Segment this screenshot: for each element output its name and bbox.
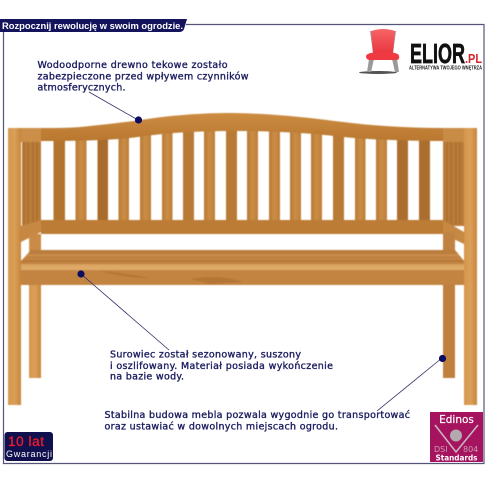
callout: seasoned material [77,270,333,382]
backrest slats [54,130,430,221]
badge: Edinos DSI 804 Standards [430,412,483,462]
left arm panel [21,128,41,251]
rear legs [29,234,455,378]
callout: stable construction: Stabilna budowa mebla pozwala wygodnie go transportować [104,410,410,421]
logo: Elior [359,29,482,74]
bench illustration [8,113,477,405]
front legs [8,128,477,405]
callout: weatherproof wood [38,60,249,124]
callout: seasoned material: i oszlifowany. Materiał posiada wykończenie [110,361,333,372]
lower back rail [41,220,443,234]
callout: seasoned material: na bazie wody. [110,372,184,382]
callout: stable construction: oraz ustawiać w dowolnych miejscach ogrodu. [104,422,338,432]
badge: Edinos DSI 804 Standards: 804 [463,445,478,454]
seat surface [20,250,465,270]
callout: stable construction [104,355,446,432]
curved top rail [41,113,443,141]
right arm panel [443,128,464,252]
badge: Edinos DSI 804 Standards: Edinos [439,414,474,426]
badge: Edinos DSI 804 Standards: DSI [434,445,448,454]
logo: Elior: .PL [465,51,482,66]
callout: weatherproof wood: Wodoodporne drewno tekowe zostało [38,60,228,71]
seat front rail [20,270,465,285]
callout: weatherproof wood: zabezpieczone przed wpływem czynników [38,72,249,82]
callout: weatherproof wood: atmosferycznych. [38,82,126,94]
badge: 10 years warranty: 10 lat [8,434,44,449]
icon: red chair [359,29,399,74]
badge: Edinos DSI 804 Standards: Standards [436,454,478,462]
heading banner: Rozpocznij rewolucję w swoim ogrodzie. [2,20,183,31]
badge: 10 years warranty: Gwarancji [6,449,52,459]
badge: 10 years warranty [4,432,53,461]
callout: seasoned material: Surowiec został sezonowany, suszony [110,350,301,360]
